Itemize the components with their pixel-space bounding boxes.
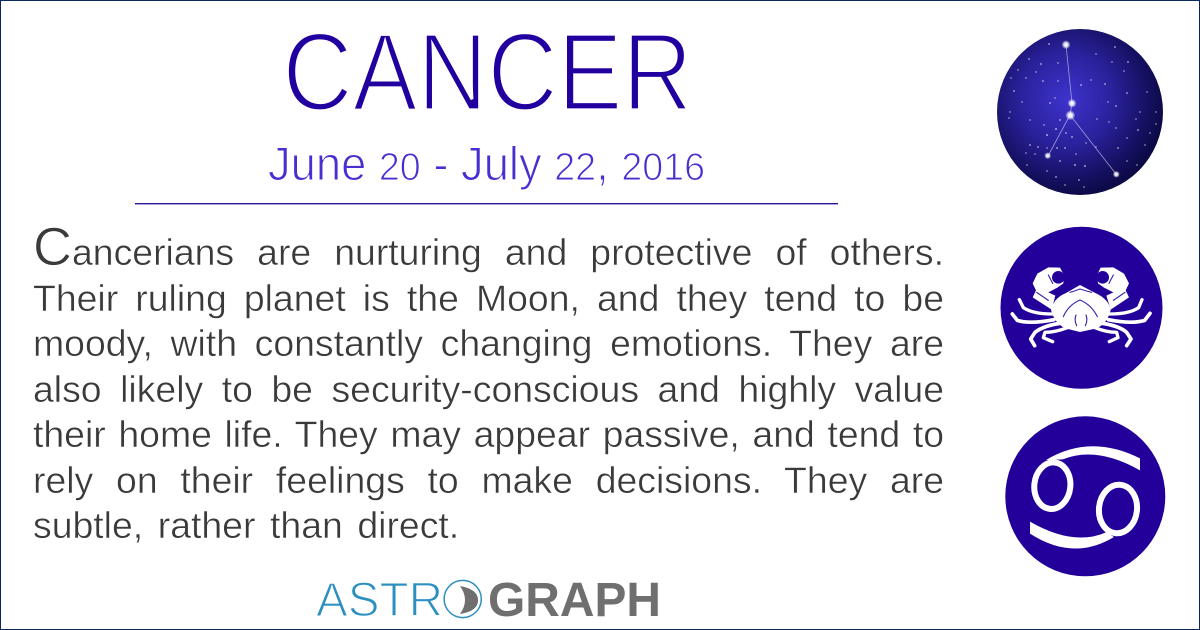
crab shell <box>1051 285 1111 332</box>
crab claws <box>1033 267 1129 310</box>
logo: astrograph <box>316 574 661 627</box>
body text: moody, with constantly changing emotions. They are <box>33 322 944 364</box>
crab legs <box>1012 300 1150 346</box>
logo: astrograph: ASTR <box>316 574 443 627</box>
logo: astrograph: GRAPH <box>488 574 661 627</box>
body text: Their ruling planet is the Moon, and they tend to be <box>33 276 944 318</box>
icon: crab <box>1000 227 1162 389</box>
body text: subtle, rather than direct. <box>33 504 459 546</box>
body text: Cancerians are nurturing and protective of others. <box>33 217 944 277</box>
body text: rely on their feelings to make decisions. They are <box>33 458 944 500</box>
icon: constellation <box>997 29 1163 195</box>
date range: June 20 - July 22, 2016 <box>268 137 705 190</box>
body text: their home life. They may appear passive, and tend to <box>33 413 944 455</box>
icon: cancer glyph <box>1005 416 1165 576</box>
title rule <box>135 203 838 204</box>
title: CANCER <box>282 11 692 134</box>
body text: also likely to be security-conscious and highly value <box>33 368 944 410</box>
